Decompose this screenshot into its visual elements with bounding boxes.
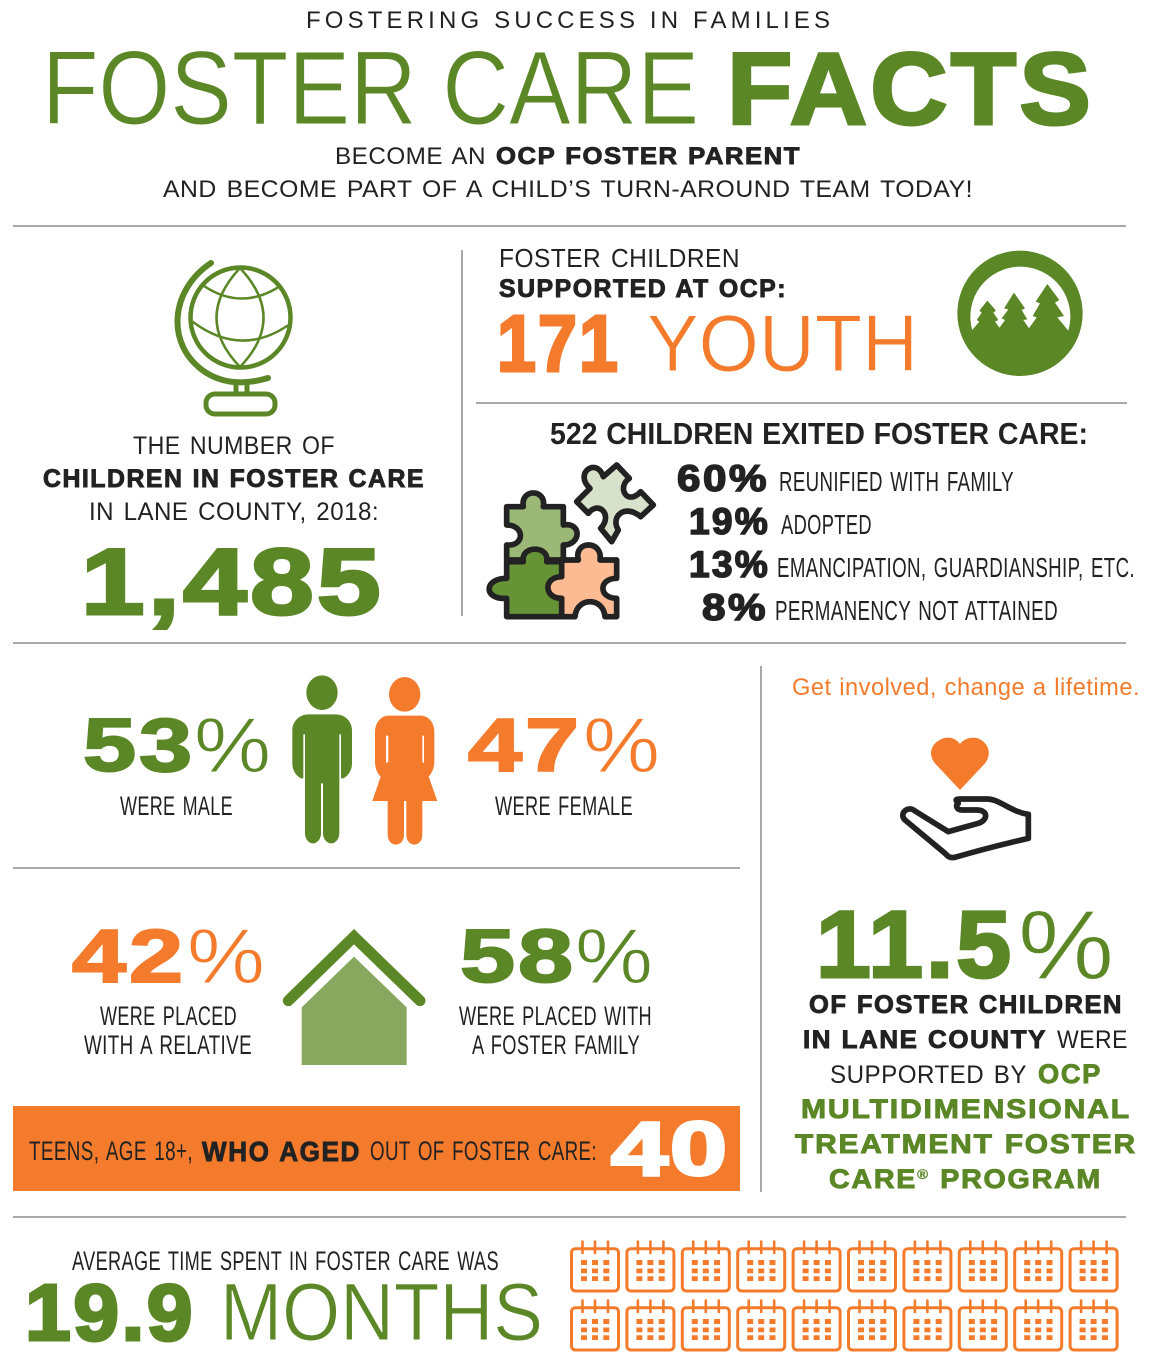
panel: gender [83, 675, 660, 845]
description: WERE [1057, 1026, 1128, 1054]
stat: reunified: REUNIFIED WITH FAMILY [779, 466, 1014, 497]
stat: adopted: ADOPTED [781, 509, 872, 540]
panel: get involved [792, 674, 1140, 1194]
banner: aged out [13, 1106, 740, 1192]
stat: relative: WERE PLACED [100, 1001, 237, 1031]
description: OF FOSTER CHILDREN [809, 991, 1123, 1019]
description [43, 432, 425, 526]
stat: male [83, 701, 271, 821]
banner: aged out: 40 [611, 1107, 729, 1192]
stat: permanency: 8% [702, 587, 768, 628]
description [795, 991, 1137, 1194]
stat: relative [72, 912, 265, 1060]
count [497, 299, 918, 389]
stat: permanency [702, 587, 1058, 628]
stat: foster family: WERE PLACED WITH [459, 1001, 652, 1031]
description: PROGRAM [930, 1164, 1102, 1194]
stat: adopted: 19% [689, 501, 770, 542]
subtitle: AND BECOME PART OF A CHILD’S TURN-AROUND TEAM TODAY! [163, 176, 973, 203]
stat: relative: % [187, 912, 265, 1000]
count: 171 [497, 299, 620, 388]
subtitle: BECOME AN [335, 143, 486, 170]
percentage: 11.5 [816, 892, 1014, 998]
number: 1,485 [81, 529, 384, 634]
icon: puzzle pieces [489, 465, 653, 617]
tagline: Get involved, change a lifetime. [792, 674, 1140, 701]
stat: relative: WITH A RELATIVE [84, 1030, 252, 1060]
panel: placement [72, 912, 653, 1065]
stat: reunified [677, 458, 1014, 499]
description: CARE [829, 1164, 912, 1194]
panel: time in care [25, 1242, 1117, 1358]
panel: children in foster care [43, 263, 425, 634]
banner: aged out: OUT OF FOSTER CARE: [370, 1136, 597, 1166]
description: OCP [1038, 1059, 1102, 1089]
duration: MONTHS [220, 1267, 543, 1358]
label: AVERAGE TIME SPENT IN FOSTER CARE WAS [72, 1246, 499, 1276]
stat: emancipation: 13% [689, 544, 770, 585]
stat: adopted [689, 501, 872, 542]
stat: male: 53 [83, 703, 195, 787]
description: MULTIDIMENSIONAL [801, 1094, 1131, 1124]
percentage: % [1018, 890, 1114, 1000]
duration [25, 1267, 543, 1358]
stat: female: % [583, 701, 660, 789]
subtitle: OCP FOSTER PARENT [496, 143, 801, 170]
title: FACTS [727, 32, 1094, 146]
stat: female [468, 701, 660, 821]
percentage [816, 890, 1114, 1000]
label: FOSTER CHILDREN [499, 243, 740, 273]
icon: trees badge [957, 251, 1083, 376]
header [42, 7, 1094, 203]
description: IN LANE COUNTY [803, 1026, 1047, 1054]
description: THE NUMBER OF [133, 432, 335, 460]
stat: foster family: % [575, 912, 653, 1000]
stat: foster family: 58 [460, 914, 576, 998]
description: TREATMENT FOSTER [795, 1129, 1137, 1159]
count: YOUTH [647, 299, 918, 389]
heading: 522 CHILDREN EXITED FOSTER CARE: [550, 416, 1088, 451]
icon: calendars [572, 1242, 1117, 1350]
description: IN LANE COUNTY, 2018: [89, 498, 379, 526]
label: SUPPORTED AT OCP: [499, 275, 787, 303]
duration: 19.9 [25, 1268, 195, 1357]
icon: house [288, 937, 420, 1065]
stat: foster family: A FOSTER FAMILY [472, 1030, 640, 1060]
stat: male: WERE MALE [120, 791, 233, 821]
icon: male figure [292, 675, 352, 843]
subtitle [163, 143, 973, 203]
label [499, 243, 787, 303]
stat: relative: 42 [72, 914, 186, 998]
stat: female: WERE FEMALE [495, 791, 633, 821]
stat: female: 47 [468, 703, 582, 787]
banner: aged out: TEENS, AGE 18+, [29, 1136, 193, 1166]
title: FOSTER CARE [42, 30, 699, 147]
stat: emancipation [689, 544, 1135, 585]
stat: reunified: 60% [677, 458, 769, 499]
icon: female figure [372, 677, 437, 845]
panel: children supported [497, 243, 1083, 389]
stat: foster family [459, 912, 653, 1060]
description: ® [917, 1166, 930, 1182]
stat: male: % [194, 701, 271, 789]
banner: aged out: WHO AGED [202, 1136, 361, 1167]
description: SUPPORTED BY [830, 1061, 1027, 1089]
description: CHILDREN IN FOSTER CARE [43, 465, 425, 493]
icon: globe [177, 263, 290, 414]
icon: hand with heart [903, 738, 1028, 858]
eyebrow: FOSTERING SUCCESS IN FAMILIES [306, 7, 830, 34]
panel: exits from care [489, 416, 1135, 628]
